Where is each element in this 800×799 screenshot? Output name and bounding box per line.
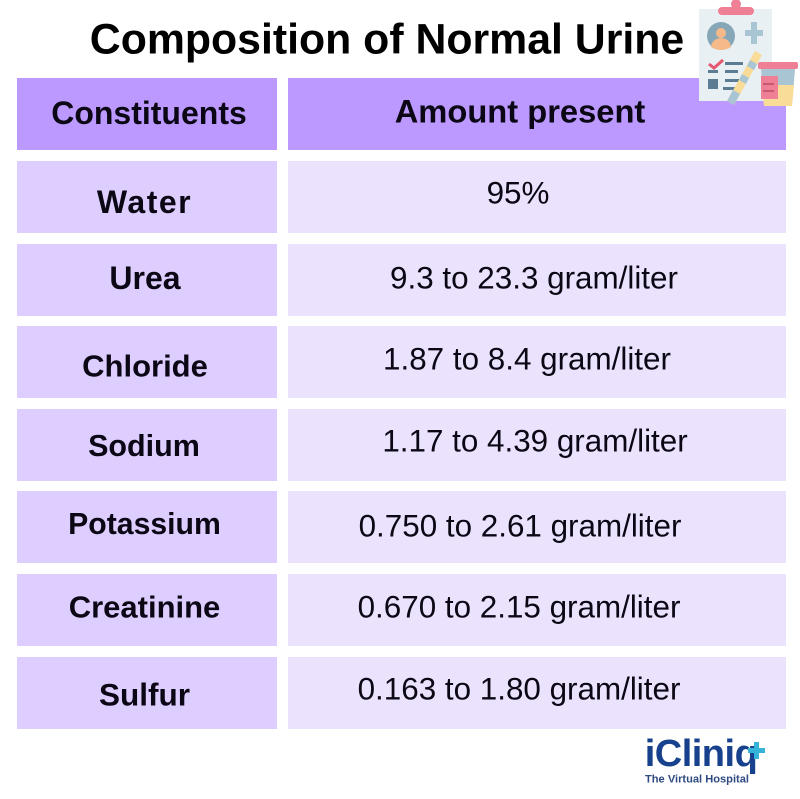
row: creatinine amount [288, 574, 786, 646]
row: sodium name: Sodium [88, 429, 200, 463]
row: urea amount [288, 244, 786, 316]
row: sulfur amount [288, 657, 786, 729]
panel: header constituents: Constituents [51, 95, 247, 131]
row: potassium name [17, 491, 277, 563]
row: chloride amount [288, 326, 786, 398]
row: chloride name [17, 326, 277, 398]
row: water amount [288, 161, 786, 233]
row: chloride name: Chloride [82, 348, 208, 384]
row: water amount: 95% [487, 175, 549, 210]
row: potassium name: Potassium [68, 508, 221, 541]
logo: iCliniq: iCliniq [645, 733, 757, 775]
row: urea name: Urea [109, 260, 181, 296]
row: creatinine amount: 0.670 to 2.15 gram/liter [358, 589, 680, 624]
row: sulfur name [17, 657, 277, 729]
logo: iCliniq: The Virtual Hospital [645, 773, 749, 785]
row: water name: Water [97, 184, 192, 220]
row: urea name [17, 244, 277, 316]
row: creatinine name [17, 574, 277, 646]
row: potassium amount [288, 491, 786, 563]
title: Composition of Normal Urine [90, 16, 684, 64]
row: sodium amount [288, 409, 786, 481]
row: chloride amount: 1.87 to 8.4 gram/liter [383, 341, 671, 376]
icon: clipboard with sample cup [699, 0, 798, 106]
panel: header constituents [17, 78, 277, 150]
row: sodium amount: 1.17 to 4.39 gram/liter [382, 423, 688, 458]
row: creatinine name: Creatinine [69, 590, 220, 624]
row: sulfur name: Sulfur [99, 676, 190, 712]
row: urea amount: 9.3 to 23.3 gram/liter [390, 260, 678, 295]
row: potassium amount: 0.750 to 2.61 gram/liter [359, 508, 681, 543]
row: sodium name [17, 409, 277, 481]
panel: header amount present [288, 78, 786, 150]
row: water name [17, 161, 277, 233]
panel: header amount present: Amount present [395, 93, 645, 130]
row: sulfur amount: 0.163 to 1.80 gram/liter [358, 671, 680, 706]
